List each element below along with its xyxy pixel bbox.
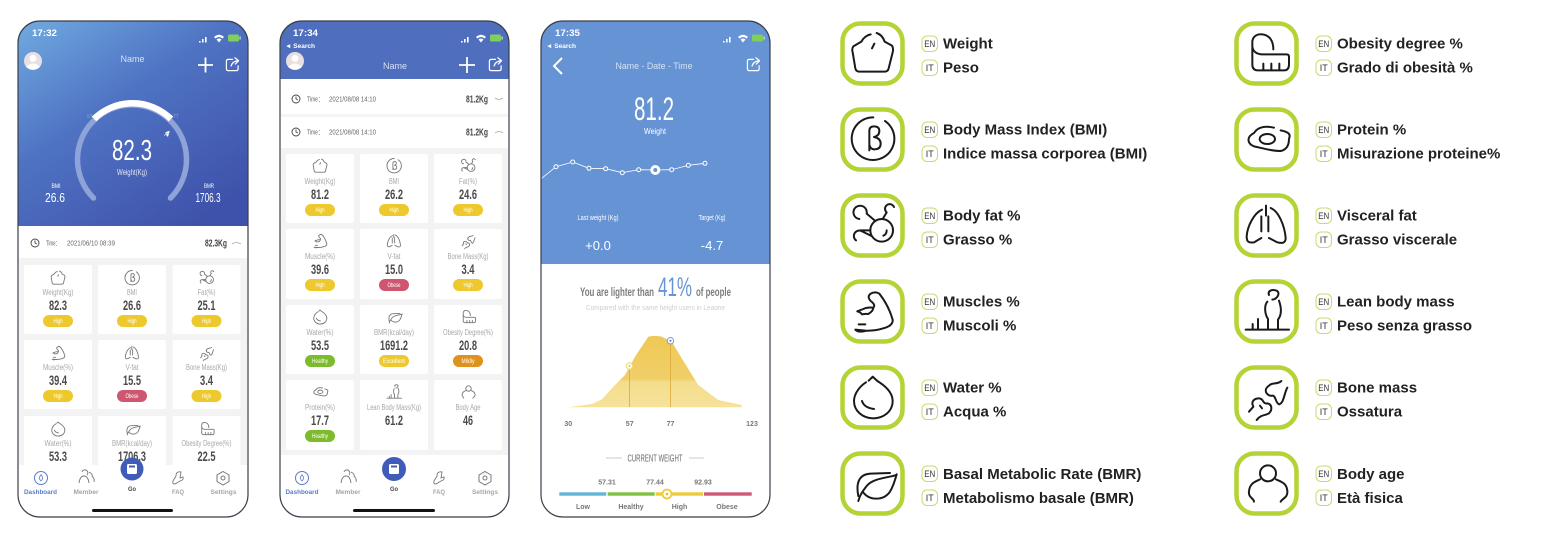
- legend row: BMR: Basal Metabolic Rate (BMR): [943, 466, 1141, 483]
- card: water: 53.3: [49, 448, 67, 464]
- card: fat: Fat(%): [198, 288, 216, 297]
- gauge: weight: BMI: [52, 183, 61, 190]
- time row: [31, 238, 241, 250]
- card: obesity degree: [434, 305, 502, 374]
- current weight scale: Healthy: [618, 504, 644, 511]
- card: BMI: BMI: [389, 177, 399, 186]
- legend row: body age: IT: [1320, 493, 1328, 503]
- legend row: BMR: Metabolismo basale (BMR): [943, 490, 1134, 507]
- card: bone mass: Bone Mass(Kg): [186, 363, 227, 372]
- gauge: weight: BMR: [204, 183, 214, 190]
- header panel: gradient gauge: Name: [120, 54, 144, 64]
- card: bone mass: High: [202, 394, 211, 400]
- history row 1: [281, 94, 508, 117]
- distribution chart: [564, 336, 758, 428]
- legend row: lean body mass: Lean body mass: [1337, 294, 1455, 310]
- card: v-fat: 15.5: [123, 372, 141, 388]
- legend row: water: Water %: [943, 380, 1002, 396]
- card: fat: [434, 154, 502, 223]
- legend row: protein: Misurazione proteine%: [1337, 146, 1500, 162]
- legend row: bone mass: IT: [1320, 407, 1328, 417]
- gauge: weight: [45, 103, 220, 205]
- distribution chart: 57: [626, 421, 634, 428]
- header panel: weight trend: -4.7: [701, 238, 723, 253]
- card: water: 53.5: [311, 337, 329, 353]
- bottom navigation: [286, 457, 498, 512]
- legend row: BMI: EN: [924, 125, 935, 135]
- gauge: weight: 26.6: [45, 190, 65, 205]
- legend row: visceral fat: Visceral fat: [1337, 208, 1417, 224]
- card: fat: 24.6: [459, 186, 477, 202]
- legend row: body age: Età fisica: [1337, 490, 1404, 507]
- header panel: weight trend: Name - Date - Time: [616, 61, 692, 71]
- card: lean body mass: Lean Body Mass(Kg): [367, 403, 421, 412]
- legend row: muscles: EN: [924, 297, 935, 307]
- card: bone mass: [434, 229, 502, 299]
- card: protein: Healthy: [312, 434, 328, 440]
- card: fat: Fat(%): [459, 177, 477, 186]
- card: muscle: High: [316, 283, 324, 289]
- legend row: BMI: [842, 110, 1147, 170]
- legend row: protein: Protein %: [1337, 122, 1406, 138]
- phone screen: weight detail: [541, 21, 770, 517]
- legend row: visceral fat: Grasso viscerale: [1337, 232, 1457, 248]
- bottom navigation: FAQ: [172, 489, 184, 496]
- card: weight: Weight(Kg): [304, 177, 336, 186]
- legend row: weight: IT: [926, 63, 934, 73]
- current weight scale: 57.31: [598, 480, 616, 486]
- card: protein: [286, 380, 354, 450]
- metric grid: [19, 258, 247, 468]
- card: bone mass: [172, 340, 240, 409]
- card: bone mass: 3.4: [462, 261, 475, 277]
- legend row: water: Acqua %: [943, 404, 1006, 420]
- legend row: obesity degree: EN: [1318, 39, 1329, 49]
- card: muscle: [286, 229, 354, 299]
- bottom navigation: Member: [74, 489, 99, 496]
- card: BMI: 26.6: [123, 297, 141, 313]
- legend row: lean body mass: [1236, 282, 1472, 342]
- legend row: lean body mass: IT: [1320, 321, 1328, 331]
- legend row: water: IT: [926, 407, 934, 417]
- header panel: weight trend: Target (Kg): [698, 215, 726, 222]
- card: muscle: Muscle(%): [305, 252, 335, 261]
- legend row: visceral fat: EN: [1318, 211, 1329, 221]
- legend row: body age: EN: [1318, 469, 1329, 479]
- card: BMR: 1706.3: [118, 448, 146, 464]
- card: v-fat: V-fat: [126, 363, 139, 372]
- card: muscle: 39.6: [311, 261, 329, 277]
- legend row: muscles: IT: [926, 321, 934, 331]
- card: water: Healthy: [312, 359, 328, 365]
- card: BMR: 1691.2: [380, 337, 408, 353]
- bottom navigation: Settings: [210, 489, 237, 496]
- legend row: body age: [1236, 454, 1405, 514]
- card: protein: Protein(%): [305, 403, 335, 412]
- header panel: weight trend: 17:35: [555, 28, 581, 39]
- card: weight: Weight(Kg): [42, 288, 74, 297]
- time row: 82.3Kg: [205, 238, 227, 250]
- card: v-fat: V-fat: [388, 252, 401, 261]
- card: protein: 17.7: [311, 412, 329, 428]
- card: BMI: High: [128, 319, 136, 325]
- gauge: weight: 82.3: [112, 135, 152, 167]
- card: muscle: Muscle(%): [43, 363, 73, 372]
- card: v-fat: [98, 340, 166, 409]
- bottom navigation: Settings: [472, 489, 498, 496]
- card: lean body mass: 61.2: [385, 412, 403, 428]
- comparison heading: [580, 272, 731, 312]
- legend row: weight: [842, 24, 993, 84]
- card: fat: 25.1: [198, 297, 216, 313]
- header panel: gradient gauge: [18, 21, 248, 226]
- legend row: body fat: IT: [926, 235, 934, 245]
- legend row: muscles: Muscoli %: [943, 318, 1016, 334]
- time row: Time：: [46, 240, 60, 248]
- history row 1: 81.2Kg: [466, 94, 488, 106]
- history row 1: Time：: [307, 96, 323, 104]
- header panel: weight trend: [541, 21, 770, 264]
- legend row: obesity degree: IT: [1320, 63, 1328, 73]
- card: BMR: Excellent: [383, 359, 405, 365]
- history row 2: [292, 128, 503, 138]
- card: muscle: 39.4: [49, 372, 67, 388]
- legend row: obesity degree: [1236, 24, 1473, 84]
- legend row: body fat: [842, 196, 1021, 256]
- legend row: visceral fat: [1236, 196, 1457, 256]
- legend row: protein: [1236, 110, 1500, 170]
- legend row: water: [842, 368, 1006, 428]
- current weight scale: CURRENT WEIGHT: [628, 454, 682, 464]
- card: body age: [434, 380, 502, 450]
- card: obesity degree: Obesity Degree(%): [182, 439, 232, 448]
- current weight scale: 92.93: [694, 480, 712, 486]
- card: body age: 46: [463, 412, 473, 428]
- legend row: weight: Weight: [943, 36, 993, 52]
- legend row: BMR: EN: [924, 469, 935, 479]
- legend row: BMI: IT: [926, 149, 934, 159]
- card: BMI: 26.2: [385, 186, 403, 202]
- history row 1: 2021/08/08 14:10: [329, 96, 376, 104]
- card: weight: 82.3: [49, 297, 67, 313]
- phone screen: dashboard: [18, 21, 248, 517]
- card: water: [24, 416, 92, 468]
- current weight scale: 77.44: [646, 480, 664, 486]
- legend row: bone mass: Bone mass: [1337, 380, 1417, 396]
- comparison heading: 41%: [658, 272, 692, 302]
- legend row: lean body mass: Peso senza grasso: [1337, 318, 1472, 334]
- card: bone mass: 3.4: [200, 372, 213, 388]
- comparison heading: You are lighter than: [580, 285, 654, 299]
- header panel: weight trend: 81.2: [634, 91, 674, 127]
- card: BMR: [360, 305, 428, 374]
- card: bone mass: Bone Mass(Kg): [448, 252, 489, 261]
- card: BMI: BMI: [127, 288, 137, 297]
- legend row: bone mass: EN: [1318, 383, 1329, 393]
- bottom navigation: Go: [128, 486, 136, 493]
- legend row: BMR: IT: [926, 493, 934, 503]
- card: v-fat: [360, 229, 428, 299]
- card: muscle: [24, 340, 92, 409]
- header panel: blue bar: Name: [383, 61, 407, 71]
- legend row: muscles: Muscles %: [943, 294, 1020, 310]
- card: weight: [286, 154, 354, 223]
- card: v-fat: Obese: [388, 283, 401, 289]
- comparison heading: of people: [696, 285, 731, 299]
- legend row: water: EN: [924, 383, 935, 393]
- card: muscle: High: [54, 394, 62, 400]
- card: weight: 81.2: [311, 186, 329, 202]
- distribution chart: 30: [564, 421, 572, 428]
- card: BMR: BMR(kcal/day): [374, 328, 414, 337]
- card: BMI: [360, 154, 428, 223]
- card: BMR: [98, 416, 166, 468]
- card: fat: High: [202, 319, 211, 325]
- comparison heading: Compared with the same height users in Leaone: [586, 303, 725, 312]
- time row: 2021/06/10 08:39: [67, 240, 115, 248]
- card: obesity degree: Obesity Degree(%): [443, 328, 493, 337]
- legend row: obesity degree: Grado di obesità %: [1337, 60, 1473, 76]
- card: water: [286, 305, 354, 374]
- card: water: Water(%): [44, 439, 72, 448]
- bottom navigation: Member: [336, 489, 361, 496]
- gauge: weight: 77: [173, 114, 179, 120]
- history row 2: 81.2Kg: [466, 128, 488, 138]
- header panel: weight trend: Last weight (Kg): [578, 215, 618, 222]
- legend row: weight: Peso: [943, 60, 979, 76]
- gauge: weight: 1706.3: [196, 190, 220, 205]
- gauge: weight: 57: [87, 114, 93, 120]
- card: water: Water(%): [306, 328, 334, 337]
- card: v-fat: Obese: [126, 394, 139, 400]
- header panel: weight trend: Weight: [644, 127, 667, 136]
- current weight scale: High: [672, 504, 687, 511]
- header panel: blue bar: [280, 21, 509, 79]
- current weight scale: Low: [576, 504, 591, 511]
- line chart: weight history: [542, 160, 707, 178]
- history row 2: 2021/08/08 14:10: [329, 130, 376, 136]
- legend row: weight: EN: [924, 39, 935, 49]
- card: BMI: High: [390, 208, 398, 214]
- legend row: protein: EN: [1318, 125, 1329, 135]
- card: weight: [24, 265, 92, 334]
- legend row: body age: Body age: [1337, 466, 1405, 483]
- card: BMI: [98, 265, 166, 334]
- card: weight: High: [54, 319, 62, 325]
- legend row: BMI: Body Mass Index (BMI): [943, 122, 1107, 138]
- legend column 2: [1236, 24, 1500, 514]
- bottom navigation: Go: [390, 486, 398, 493]
- header panel: blue bar: 17:34: [293, 28, 319, 39]
- card: bone mass: High: [464, 283, 472, 289]
- card: body age: Body Age: [456, 403, 481, 412]
- bottom navigation: FAQ: [433, 489, 445, 496]
- legend row: body fat: Grasso %: [943, 232, 1012, 248]
- card: obesity degree: [172, 416, 240, 468]
- current weight scale: [559, 454, 752, 511]
- card: obesity degree: 20.8: [459, 337, 477, 353]
- card: weight: High: [316, 208, 324, 214]
- legend row: BMI: Indice massa corporea (BMI): [943, 146, 1147, 162]
- card: lean body mass: [360, 380, 428, 450]
- legend row: visceral fat: IT: [1320, 235, 1328, 245]
- bottom navigation: Dashboard: [286, 489, 319, 496]
- card: obesity degree: 22.5: [198, 448, 216, 464]
- distribution chart: 77: [667, 421, 674, 428]
- legend row: BMR: [842, 454, 1141, 514]
- header panel: weight trend: +0.0: [585, 238, 611, 253]
- legend column 1: [842, 24, 1147, 514]
- card: obesity degree: Mildly: [462, 359, 474, 365]
- header panel: gradient gauge: 17:32: [32, 28, 57, 39]
- card: BMR: BMR(kcal/day): [112, 439, 152, 448]
- legend row: obesity degree: Obesity degree %: [1337, 36, 1463, 52]
- legend row: muscles: [842, 282, 1020, 342]
- legend row: body fat: EN: [924, 211, 935, 221]
- header panel: blue bar: ◄ Search: [285, 43, 315, 50]
- card: fat: [172, 265, 240, 334]
- legend row: body fat: Body fat %: [943, 208, 1021, 224]
- phone screen: history: [280, 21, 509, 517]
- card: v-fat: 15.0: [385, 261, 403, 277]
- bottom navigation: [19, 458, 247, 512]
- legend row: bone mass: [1236, 368, 1417, 428]
- header panel: weight trend: ◄ Search: [546, 43, 576, 50]
- legend row: lean body mass: EN: [1318, 297, 1329, 307]
- card: fat: High: [464, 208, 472, 214]
- distribution chart: 123: [746, 421, 758, 428]
- metric grid: [281, 148, 508, 455]
- legend row: bone mass: Ossatura: [1337, 404, 1403, 420]
- bottom navigation: Dashboard: [24, 489, 57, 496]
- legend row: protein: IT: [1320, 149, 1328, 159]
- current weight scale: Obese: [716, 504, 738, 511]
- gauge: weight: Weight(Kg): [117, 168, 147, 177]
- history row 2: Time：: [307, 130, 323, 136]
